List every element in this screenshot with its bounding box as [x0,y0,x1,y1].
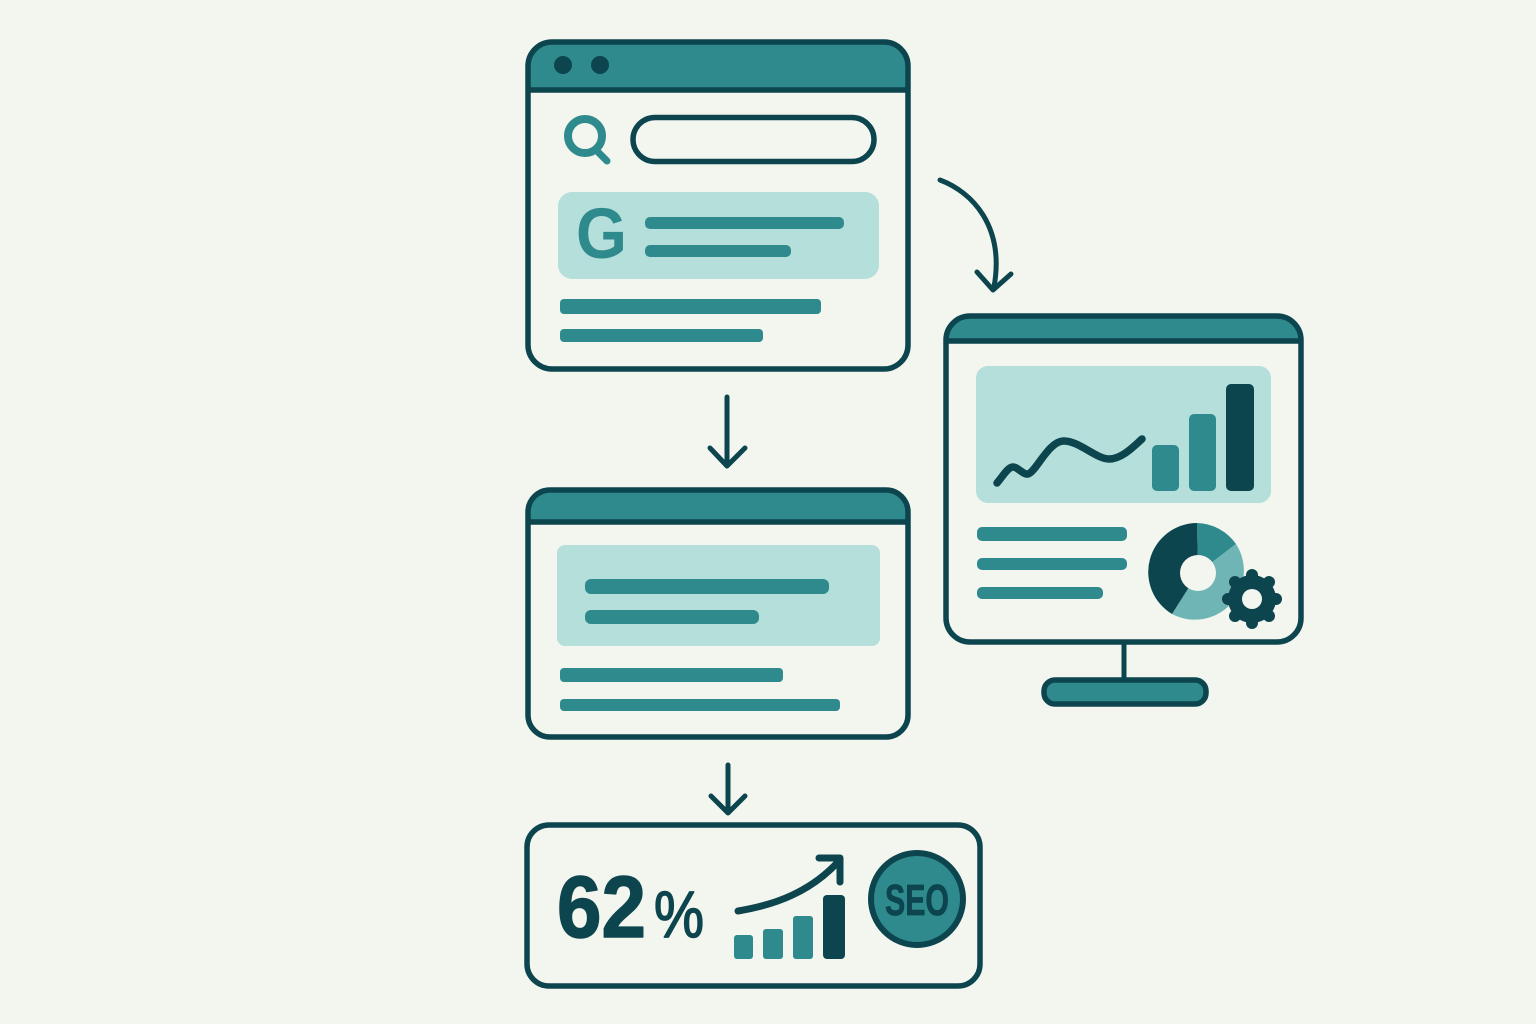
SEO badge: SEO [885,876,949,925]
icon: G logo: G [576,195,627,274]
icon: gear [1228,575,1276,623]
growth bars [734,895,845,959]
arrow: curved to dashboard [940,180,1011,290]
featured search result [558,192,879,279]
result lines [645,217,844,257]
text lines [560,668,840,711]
browser title bar [528,42,908,90]
SEO badge [871,853,963,945]
text lines [977,527,1127,599]
statistic: 62%: 62 [557,859,646,956]
panel: content page window [528,490,908,737]
growth arrow [738,858,840,911]
panel: search browser window [528,42,908,369]
donut chart [1148,523,1244,620]
browser title bar [528,490,908,522]
arrow: down to content page [710,397,745,466]
panel: dashboard monitor [946,316,1301,704]
line chart [997,439,1142,483]
text lines [560,299,821,342]
arrow: down to results [711,765,745,813]
search input [633,118,874,162]
icon: magnifying glass [568,119,607,161]
bar chart [1152,384,1254,491]
panel: results summary [527,825,980,986]
highlighted content block [557,545,880,646]
monitor stand [1044,642,1206,704]
window controls [554,56,609,74]
monitor title bar [946,316,1301,341]
chart panel [976,366,1271,503]
percent sign: % [654,877,704,951]
